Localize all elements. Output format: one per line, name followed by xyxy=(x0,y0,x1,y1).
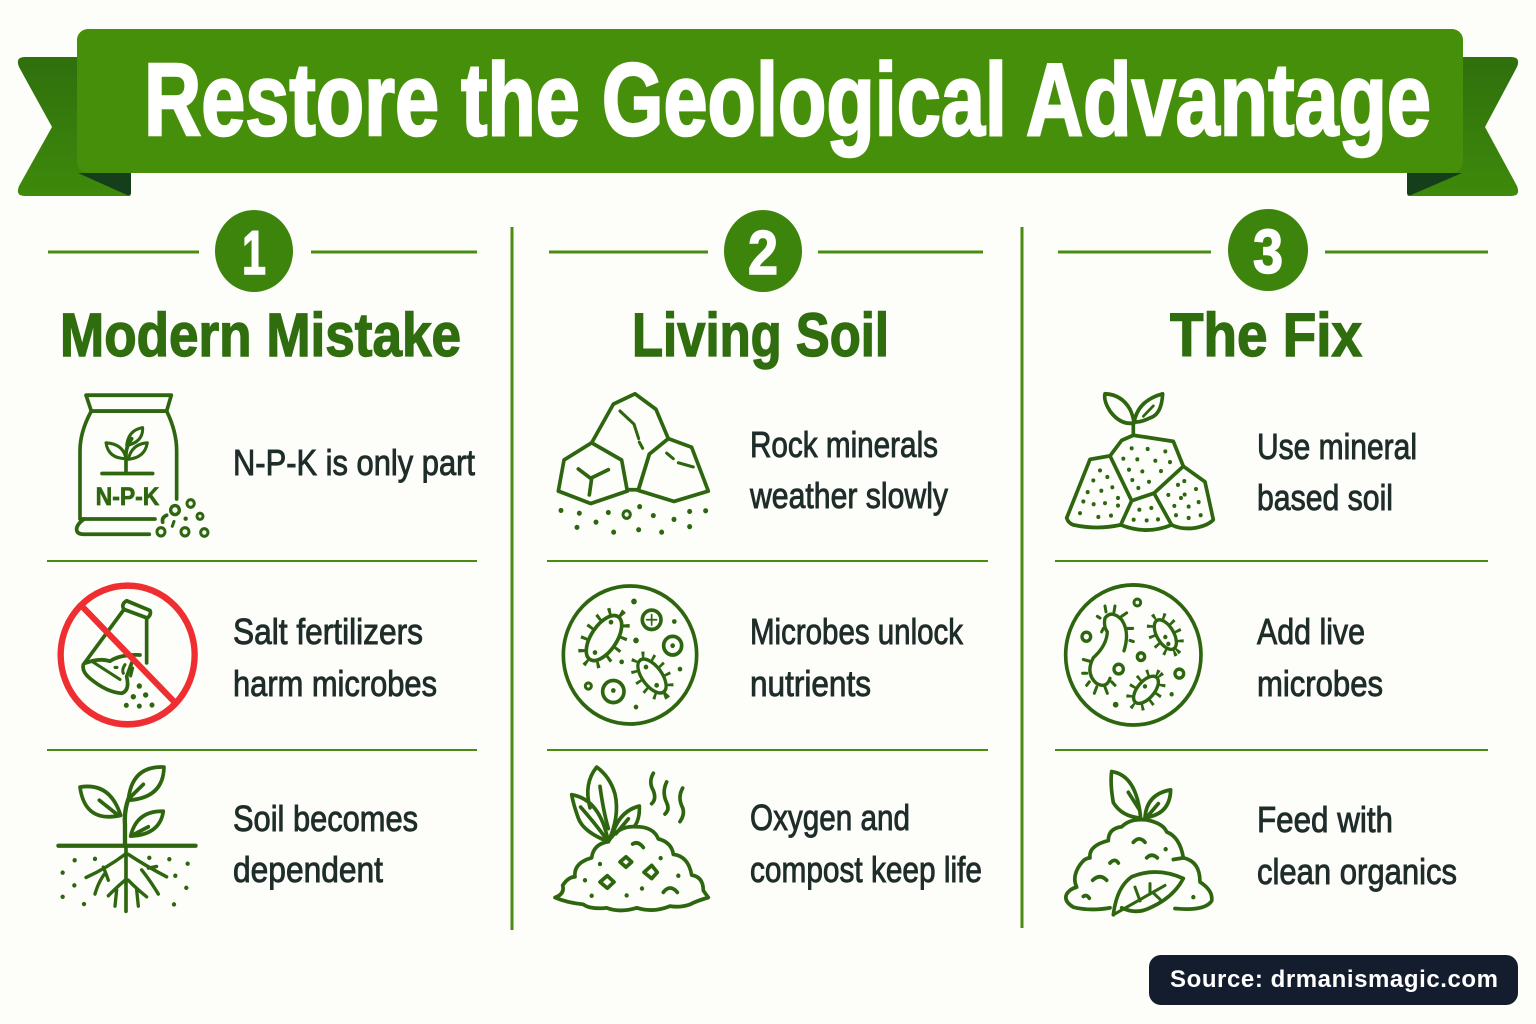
text: soil becomes xyxy=(233,798,418,890)
panel: living soil xyxy=(547,210,988,910)
column divider 2 xyxy=(1020,227,1024,928)
text: salt fertilizers: Salt fertilizers xyxy=(233,611,423,652)
panel: the fix xyxy=(1055,209,1488,915)
heading: modern mistake: Modern Mistake xyxy=(60,301,461,369)
bag label: N-P-K xyxy=(96,484,160,511)
text: use mineral xyxy=(1257,426,1417,518)
source badge xyxy=(1149,955,1518,1005)
number badge 2 xyxy=(724,210,802,292)
number badge 2: 2 xyxy=(748,219,778,288)
icon: organic mound with leaf xyxy=(1066,772,1212,915)
icon: rock minerals xyxy=(558,394,708,532)
title banner xyxy=(18,29,1518,196)
ribbon fold right xyxy=(1407,173,1462,195)
number badge 3: 3 xyxy=(1253,218,1283,287)
number badge 1 xyxy=(215,210,293,292)
text: use mineral: based soil xyxy=(1257,477,1393,518)
text: rock minerals: Rock minerals xyxy=(750,424,938,465)
icon: fertilizer bag xyxy=(77,395,208,536)
icon: microbes in a circle xyxy=(563,586,697,724)
text: oxygen and compost: Oxygen and xyxy=(750,797,910,838)
text: feed with clean organics: clean organics xyxy=(1257,851,1457,892)
column divider 1 xyxy=(510,227,514,930)
text: salt fertilizers xyxy=(233,611,437,704)
icon: compost pile with leaves xyxy=(555,767,708,910)
icon: dependent plant roots xyxy=(58,767,196,911)
number badge 3 xyxy=(1228,209,1308,291)
source badge: Source: drmanismagic.com xyxy=(1170,966,1498,993)
text: microbes unlock: Microbes unlock xyxy=(750,611,964,652)
heading: the fix: The Fix xyxy=(1170,301,1362,369)
icon: sprouting mineral rocks xyxy=(1067,394,1213,530)
text: microbes unlock: nutrients xyxy=(750,663,871,704)
text: feed with clean organics: Feed with xyxy=(1257,799,1393,840)
text: n-p-k: N-P-K is only part xyxy=(233,442,475,483)
text: add live microbes: microbes xyxy=(1257,663,1383,704)
text: soil becomes: dependent xyxy=(233,849,383,890)
text: microbes unlock xyxy=(750,611,964,704)
number badge 1: 1 xyxy=(242,219,266,288)
icon: live microbes in a circle xyxy=(1066,585,1201,725)
text: soil becomes: Soil becomes xyxy=(233,798,418,839)
ribbon tail left xyxy=(18,57,131,196)
heading: living soil: Living Soil xyxy=(632,301,889,369)
text: rock minerals: weather slowly xyxy=(749,475,948,516)
text: add live microbes: Add live xyxy=(1257,611,1365,652)
text: use mineral: Use mineral xyxy=(1257,426,1417,467)
text: oxygen and compost xyxy=(750,797,982,890)
banner body xyxy=(77,29,1463,173)
text: add live microbes xyxy=(1257,611,1383,704)
panel: modern mistake xyxy=(47,210,477,911)
ribbon tail right xyxy=(1407,57,1518,196)
text: salt fertilizers: harm microbes xyxy=(233,663,437,704)
text: rock minerals xyxy=(749,424,948,516)
text: feed with clean organics xyxy=(1257,799,1457,892)
icon: no salt fertilizer xyxy=(61,586,195,724)
ribbon fold left xyxy=(78,173,131,195)
text: oxygen and compost: compost keep life xyxy=(750,849,982,890)
